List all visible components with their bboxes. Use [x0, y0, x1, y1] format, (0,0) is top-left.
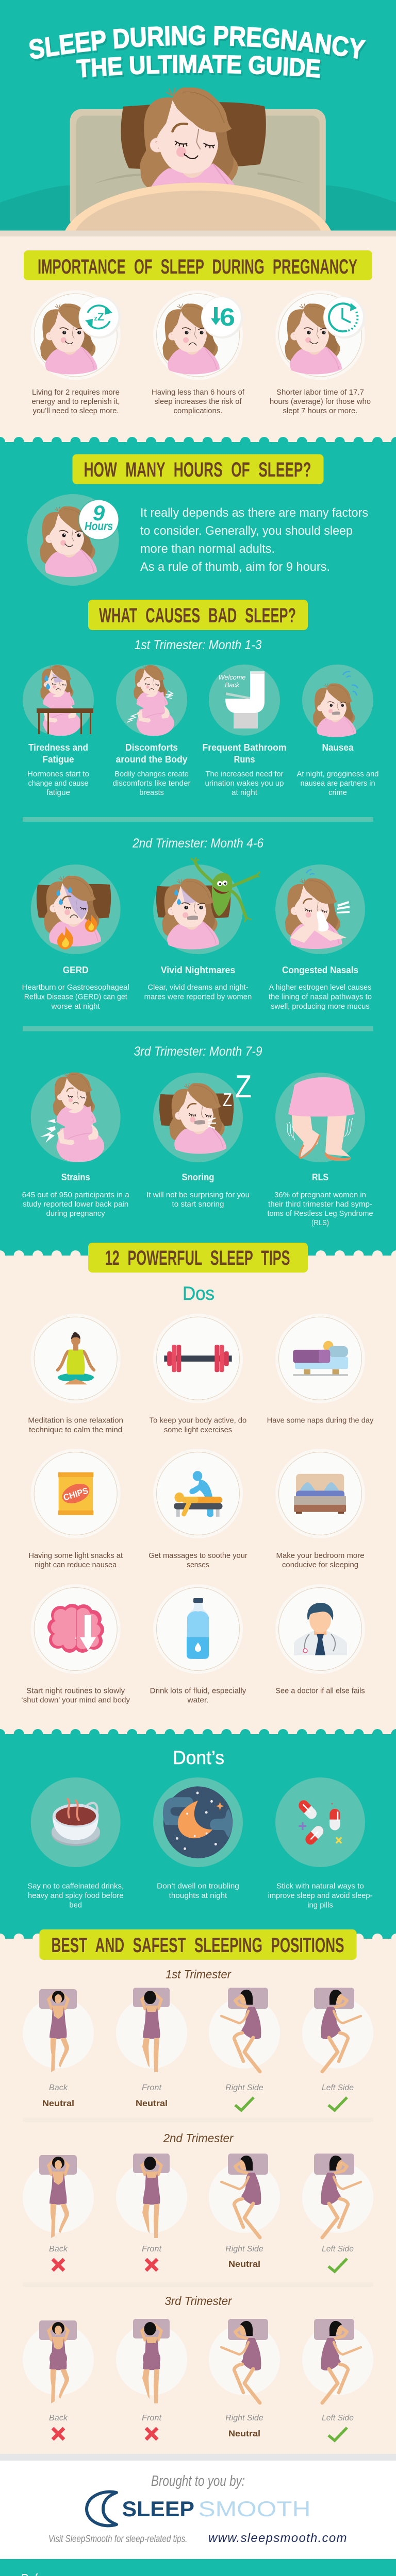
position row: first trimester: Neutral — [42, 2098, 74, 2108]
item: under six hours: 6 — [220, 304, 235, 331]
panel: best and safest sleeping positions — [23, 1929, 373, 2441]
tip: night routine: Start night routines to slowly — [26, 1687, 125, 1695]
cause: nausea — [297, 665, 378, 797]
cause: strains: study reported lower back pain — [23, 1200, 128, 1209]
cause: bathroom runs: Frequent Bathroom — [202, 742, 287, 753]
position row: third trimester: Neutral — [228, 2429, 260, 2438]
cause: bathroom runs: at night — [232, 789, 257, 797]
item: shorter labor — [270, 291, 371, 415]
cause: bathroom runs: urination wakes you up — [205, 779, 284, 788]
heading banner: positions — [39, 1929, 357, 1960]
position row: second trimester: Neutral — [228, 2259, 260, 2269]
panel: twelve sleep tips, dos — [21, 1243, 374, 1704]
text: website: www.sleepsmooth.com — [208, 2531, 346, 2545]
cause: GERD: Reflux Disease (GERD) can get — [24, 993, 127, 1002]
item: shorter labor: hours (average) for those who — [270, 398, 371, 406]
cause: congested nasals — [269, 865, 372, 1011]
tip: light exercise: To keep your body active, do — [150, 1417, 246, 1425]
position row: third trimester: Right Side — [225, 2414, 263, 2422]
cause: tiredness: Fatigue — [42, 754, 74, 765]
panel: brought to you by — [48, 2473, 346, 2545]
position row: second trimester — [23, 2154, 373, 2272]
tip: light snacks — [28, 1449, 123, 1569]
cause: snoring: Snoring — [182, 1172, 214, 1182]
panel: don'ts — [27, 1747, 373, 1909]
tip: caffeinated drinks: heavy and spicy food before — [28, 1892, 124, 1900]
heading banner: causes — [88, 600, 308, 630]
cause: strains: Strains — [61, 1172, 90, 1182]
position row: first trimester — [23, 1988, 373, 2110]
cause: restless legs — [267, 1073, 373, 1227]
tip: night routine: ‘shut down’ your mind and body — [21, 1696, 130, 1704]
position row: second trimester: Right Side — [225, 2245, 263, 2253]
item: under six hours: complications. — [173, 407, 223, 415]
item: under six hours: Having less than 6 hours of — [152, 388, 245, 397]
tip: bedroom: conducive for sleeping — [282, 1561, 358, 1569]
title — [29, 25, 367, 80]
cause: restless legs: (RLS) — [311, 1219, 329, 1227]
cause: GERD: GERD — [63, 965, 89, 975]
tip: avoid sleeping pills — [268, 1777, 373, 1909]
cause: vivid nightmares: Clear, vivid dreams and night- — [147, 984, 249, 992]
title: THE ULTIMATE GUIDE — [76, 55, 322, 80]
heading: don'ts: Dont’s — [173, 1747, 224, 1768]
subheading: positions third trimester: 3rd Trimester — [165, 2294, 233, 2308]
tip: caffeinated drinks: Say no to caffeinated drinks, — [27, 1883, 124, 1891]
panel: importance of sleep — [24, 250, 372, 415]
illustration: nine hours circle: Hours — [85, 519, 113, 533]
cause: congested nasals: Congested Nasals — [282, 965, 358, 975]
position row: first trimester: Left Side — [322, 2083, 354, 2092]
tip: light snacks: night can reduce nausea — [35, 1561, 117, 1569]
tip: massage — [148, 1449, 248, 1569]
tip: light exercise: some light exercises — [164, 1426, 232, 1434]
cause: nausea: crime — [328, 789, 347, 797]
tip: meditation — [28, 1314, 123, 1434]
cause: bathroom runs: The increased need for — [205, 770, 284, 778]
tip: meditation: technique to calm the mind — [29, 1426, 122, 1434]
cause: discomforts: around the Body — [116, 754, 188, 765]
cause: GERD: worse at night — [51, 1003, 100, 1011]
heading banner: importance — [24, 250, 372, 280]
position row: first trimester: Neutral — [136, 2098, 168, 2108]
item: under six hours — [152, 291, 245, 415]
tip: light snacks: CHIPS — [62, 1486, 89, 1503]
subheading: second trimester: 2nd Trimester: Month 4-6 — [132, 836, 263, 851]
cause: tiredness: Hormones start to — [27, 770, 89, 778]
panel: how many hours of sleep — [27, 454, 368, 586]
cause: strains — [22, 1072, 130, 1218]
cause: GERD: Heartburn or Gastroesophageal — [22, 984, 129, 992]
cause: tiredness: fatigue — [46, 789, 70, 797]
cause: snoring: It will not be surprising for you — [146, 1191, 250, 1199]
tip: light snacks: Having some light snacks at — [28, 1552, 123, 1560]
cause: strains: during pregnancy — [46, 1210, 105, 1218]
cause: bathroom runs — [202, 665, 287, 797]
position row: second trimester: Front — [142, 2245, 162, 2253]
tip: night routine — [21, 1584, 130, 1704]
logo: SleepSmooth: SLEEP — [122, 2497, 194, 2521]
cause: snoring — [146, 1069, 252, 1209]
logo: SleepSmooth — [87, 2492, 310, 2526]
tip: troubling thoughts: thoughts at night — [169, 1892, 227, 1900]
tip: troubling thoughts: Don’t dwell on troubling — [157, 1883, 239, 1891]
tip: drink water: Drink lots of fluid, especially — [150, 1687, 246, 1695]
position row: second trimester: Back — [49, 2245, 68, 2253]
cause: restless legs: 36% of pregnant women in — [274, 1191, 366, 1199]
cause: discomforts: breasts — [139, 789, 164, 797]
item: shorter labor: slept 7 hours or more. — [283, 407, 358, 415]
item: shorter labor: Shorter labor time of 17.7 — [276, 388, 364, 397]
cause: snoring: to start snoring — [172, 1200, 224, 1209]
cause: discomforts: Bodily changes create — [114, 770, 189, 778]
cause: restless legs: RLS — [312, 1172, 328, 1182]
paragraph: hours explanation — [140, 506, 368, 574]
logo: SleepSmooth: SMOOTH — [198, 2497, 310, 2521]
tip: see a doctor: See a doctor if all else fails — [275, 1687, 365, 1695]
tip: light exercise — [150, 1314, 246, 1434]
subheading: first trimester: 1st Trimester: Month 1-3 — [134, 638, 262, 652]
cause: vivid nightmares: Vivid Nightmares — [161, 965, 235, 975]
cause: bathroom runs: Runs — [234, 754, 255, 765]
heading banner: tips — [88, 1243, 308, 1273]
illustration: nine hours circle: 9 — [93, 501, 105, 525]
text: brought to you by: Brought to you by: — [151, 2473, 245, 2489]
tip: meditation: Meditation is one relaxation — [28, 1417, 123, 1425]
tip: caffeinated drinks — [27, 1777, 124, 1909]
cause: vivid nightmares — [144, 857, 260, 1002]
illustration: nine hours circle — [27, 494, 120, 586]
title: SLEEP DURING PREGNANCY — [29, 25, 367, 61]
position row: first trimester: Front — [142, 2083, 162, 2092]
item: under six hours: sleep increases the risk of — [155, 398, 242, 406]
cause: discomforts: Discomforts — [125, 742, 178, 753]
icon: green monster — [191, 857, 260, 922]
cause: bathroom runs: Welcome — [219, 673, 245, 681]
item: energy to replenish — [31, 291, 121, 415]
cause: bathroom runs: Back — [225, 681, 240, 689]
tip: caffeinated drinks: bed — [69, 1901, 82, 1909]
cause: congested nasals: A higher estrogen level causes — [269, 984, 371, 992]
cause: discomforts — [112, 665, 191, 797]
panel: what causes bad sleep — [22, 600, 379, 1227]
cause: congested nasals: the lining of nasal pathways to — [269, 993, 372, 1002]
item: energy to replenish: zZ — [94, 311, 104, 323]
position row: first trimester: Back — [49, 2083, 68, 2092]
tip: massage: Get massages to soothe your — [148, 1552, 248, 1560]
cause: tiredness — [23, 665, 94, 797]
cause: tiredness: change and cause — [28, 779, 89, 788]
position row: third trimester: Left Side — [322, 2414, 354, 2422]
tip: avoid sleeping pills: Stick with natural ways to — [276, 1883, 364, 1891]
tip: drink water: water. — [187, 1696, 208, 1704]
cause: nausea: nausea are partners in — [300, 779, 375, 788]
cause: GERD — [22, 865, 129, 1011]
cause: discomforts: discomforts like tender — [112, 779, 191, 788]
cause: strains: 645 out of 950 participants in a — [22, 1191, 130, 1199]
paragraph: hours explanation: to consider. Generally, you should sleep — [140, 524, 353, 538]
tip: massage: senses — [187, 1561, 209, 1569]
item: energy to replenish: energy and to replenish it, — [32, 398, 120, 406]
cause: nausea: At night, grogginess and — [297, 770, 378, 778]
cause: vivid nightmares: mares were reported by women — [144, 993, 252, 1002]
tip: troubling thoughts — [153, 1777, 243, 1900]
paragraph: hours explanation: It really depends as there are many factors — [140, 506, 368, 520]
cause: snoring: Z — [223, 1089, 232, 1110]
tip: bedroom: Make your bedroom more — [276, 1552, 364, 1560]
tip: naps — [267, 1314, 374, 1425]
cause: snoring: Z — [235, 1069, 252, 1105]
hero illustration: woman sleeping in bed — [0, 88, 396, 230]
subheading: positions second trimester: 2nd Trimester — [163, 2131, 234, 2145]
tip: drink water — [150, 1584, 246, 1704]
cause: tiredness: Tiredness and — [28, 742, 88, 753]
cause: congested nasals: swell, producing more mucus — [271, 1003, 370, 1011]
paragraph: hours explanation: more than normal adults. — [140, 542, 275, 556]
subheading: positions first trimester: 1st Trimester — [166, 1968, 232, 1981]
tip: bedroom — [275, 1449, 365, 1569]
text: visit tagline: Visit SleepSmooth for sleep-related tips. — [48, 2534, 187, 2545]
tip: see a doctor — [275, 1584, 365, 1695]
position row: third trimester — [23, 2319, 373, 2441]
cause: nausea: Nausea — [322, 742, 354, 753]
item: energy to replenish: you’ll need to sleep more. — [33, 407, 119, 415]
tip: avoid sleeping pills: ing pills — [307, 1901, 333, 1909]
cause: restless legs: their third trimester had symp- — [268, 1200, 372, 1209]
item: energy to replenish: Living for 2 requires more — [32, 388, 120, 397]
heading: dos: Dos — [183, 1283, 214, 1304]
position row: third trimester: Front — [142, 2414, 162, 2422]
heading banner: tips: 12 POWERFUL SLEEP TIPS — [105, 1247, 290, 1269]
position row: first trimester: Right Side — [225, 2083, 263, 2092]
position row: third trimester: Back — [49, 2414, 68, 2422]
subheading: third trimester: 3rd Trimester: Month 7-9 — [134, 1044, 262, 1059]
paragraph: hours explanation: As a rule of thumb, aim for 9 hours. — [140, 560, 330, 574]
heading banner: how many hours — [72, 454, 324, 484]
tip: naps: Have some naps during the day — [267, 1417, 374, 1425]
position row: second trimester: Left Side — [322, 2245, 354, 2253]
tip: avoid sleeping pills: improve sleep and avoid sleep- — [268, 1892, 373, 1900]
cause: restless legs: toms of Restless Leg Syndrome — [267, 1210, 373, 1218]
